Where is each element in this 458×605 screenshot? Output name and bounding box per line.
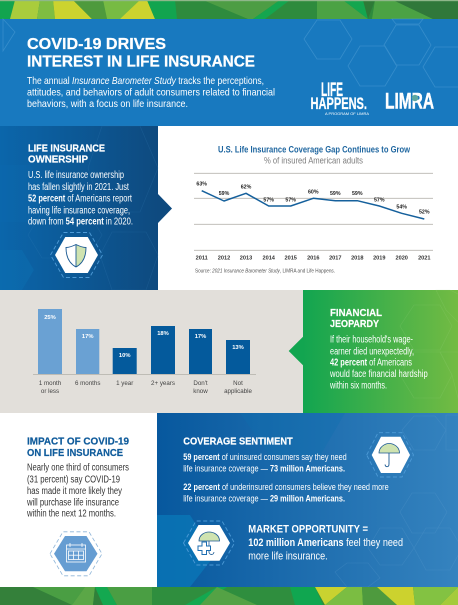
year axis: 2017	[329, 255, 342, 261]
intro text: The annual Insurance Barometer Study tracks the perceptions,	[27, 76, 264, 87]
bottom green polygon band	[0, 587, 458, 605]
body text: (31 percent) say COVID-19	[27, 474, 120, 485]
panel: bar chart	[0, 290, 303, 413]
panel: coverage gap line chart	[172, 126, 458, 290]
body text: earner died unexpectedly,	[330, 346, 414, 357]
data labels: 52%	[419, 210, 430, 216]
trend line	[202, 191, 424, 219]
year axis	[196, 255, 431, 261]
bar labels: know	[193, 388, 208, 395]
data labels: 57%	[285, 198, 296, 204]
bars	[38, 309, 250, 374]
bar values: 17%	[82, 334, 94, 340]
icon: calendar	[50, 532, 102, 576]
year axis: 2016	[307, 255, 320, 261]
arrow	[289, 337, 303, 365]
icon: shield	[50, 232, 102, 278]
heading	[27, 437, 129, 459]
body text: If their household's wage-	[330, 335, 413, 346]
coverage sentiment text: 59 percent of uninsured consumers say they need	[183, 452, 347, 463]
logo: Life Happens: LIFE	[321, 79, 343, 101]
data labels: 63%	[196, 182, 207, 188]
panel: life insurance ownership	[0, 126, 172, 290]
bar values: 18%	[157, 331, 169, 337]
data labels	[196, 182, 430, 216]
intro text: attitudes, and behaviors of adult consumers related to financial	[27, 88, 275, 99]
bar labels: Not	[233, 380, 243, 387]
body text: within the next 12 months.	[26, 509, 116, 520]
market opportunity text: more life insurance.	[248, 550, 328, 562]
body text	[26, 463, 129, 520]
heading: OWNERSHIP	[28, 155, 88, 166]
market opportunity text: 102 million Americans feel they need	[248, 537, 403, 549]
body text	[329, 335, 428, 391]
data labels: 60%	[308, 190, 319, 196]
heading	[28, 144, 105, 166]
title: INTEREST IN LIFE INSURANCE	[27, 54, 255, 70]
body text: Nearly one third of consumers	[27, 463, 129, 474]
bar labels: 2+ years	[151, 380, 175, 387]
bar values: 13%	[232, 345, 244, 351]
market opportunity text: MARKET OPPORTUNITY =	[248, 523, 368, 535]
year axis: 2013	[240, 255, 252, 261]
coverage sentiment text: life insurance coverage — 73 million Americans.	[183, 463, 345, 474]
heading	[330, 308, 382, 330]
year axis: 2014	[262, 255, 276, 261]
icon: umbrella	[367, 433, 414, 477]
data labels: 57%	[374, 198, 385, 204]
icon: umbrella with medical cross	[184, 521, 234, 565]
panel: impact of covid-19	[0, 413, 157, 587]
year axis: 2019	[373, 255, 386, 261]
year axis: 2012	[218, 255, 230, 261]
heading: ON LIFE INSURANCE	[27, 448, 123, 459]
data labels: 62%	[241, 185, 252, 191]
year axis: 2020	[395, 255, 408, 261]
arrow	[158, 194, 172, 223]
bar labels: 6 months	[75, 380, 100, 387]
bar labels: applicable	[224, 388, 252, 395]
body text: U.S. life insurance ownership	[28, 170, 124, 181]
data labels: 54%	[396, 204, 407, 210]
bar values: 17%	[195, 334, 206, 340]
year axis: 2018	[351, 255, 364, 261]
data labels: 59%	[330, 191, 341, 197]
data labels: 57%	[263, 198, 274, 204]
panel: financial jeopardy	[289, 290, 458, 413]
body text: will purchase life insurance	[26, 498, 119, 509]
intro text: behaviors, with a focus on life insurance.	[27, 99, 188, 110]
coverage sentiment text	[183, 452, 389, 504]
intro text	[27, 76, 275, 110]
logo: Life Happens	[310, 79, 370, 116]
body text: 42 percent of Americans	[330, 358, 412, 368]
logo: Life Happens: A PROGRAM OF LIMRA	[325, 112, 370, 116]
bar labels: 1 month	[39, 380, 62, 387]
year axis: 2021	[418, 255, 431, 261]
coverage sentiment text: life insurance coverage — 29 million Americans.	[183, 493, 345, 504]
market opportunity text	[248, 523, 403, 562]
logo: Life Happens: HAPPENS.	[310, 95, 367, 113]
top green polygon band	[0, 0, 458, 19]
title	[27, 36, 255, 70]
year axis: 2015	[284, 255, 297, 261]
data labels: 59%	[219, 191, 230, 197]
body text	[28, 170, 133, 228]
bar labels: Don't	[193, 380, 208, 387]
bar values	[44, 315, 244, 359]
panel: header	[0, 19, 458, 126]
body text: has made it more likely they	[27, 486, 122, 497]
year axis: 2011	[196, 255, 208, 261]
data labels: 59%	[352, 191, 363, 197]
source note: Source: 2021 Insurance Barometer Study, LIMRA and Life Happens.	[195, 269, 335, 275]
coverage sentiment heading: COVERAGE SENTIMENT	[183, 436, 293, 447]
heading: JEOPARDY	[330, 319, 379, 330]
body text: down from 54 percent in 2020.	[28, 216, 133, 228]
bar values: 25%	[44, 315, 56, 321]
heading: FINANCIAL	[330, 308, 382, 319]
chart subtitle: % of insured American adults	[264, 156, 363, 166]
bar labels: or less	[41, 388, 59, 395]
heading: LIFE INSURANCE	[28, 144, 105, 155]
body text: would face financial hardship	[329, 369, 428, 380]
bar values: 10%	[119, 353, 131, 359]
bar labels	[39, 380, 252, 395]
title: COVID-19 DRIVES	[27, 36, 166, 53]
panel: coverage sentiment and market opportunity	[157, 413, 458, 587]
logo: LIMRA: LIMRA	[385, 88, 434, 114]
body text: has fallen slightly in 2021. Just	[28, 182, 129, 193]
coverage sentiment text: 22 percent of underinsured consumers believe they need more	[183, 482, 389, 493]
heading: IMPACT OF COVID-19	[27, 437, 129, 448]
chart title: U.S. Life Insurance Coverage Gap Continues to Grow	[218, 145, 410, 156]
body text: within six months.	[329, 380, 387, 391]
body text: having life insurance coverage,	[28, 205, 130, 216]
bar labels: 1 year	[116, 380, 133, 387]
body text: 52 percent of Americans report	[28, 193, 132, 204]
